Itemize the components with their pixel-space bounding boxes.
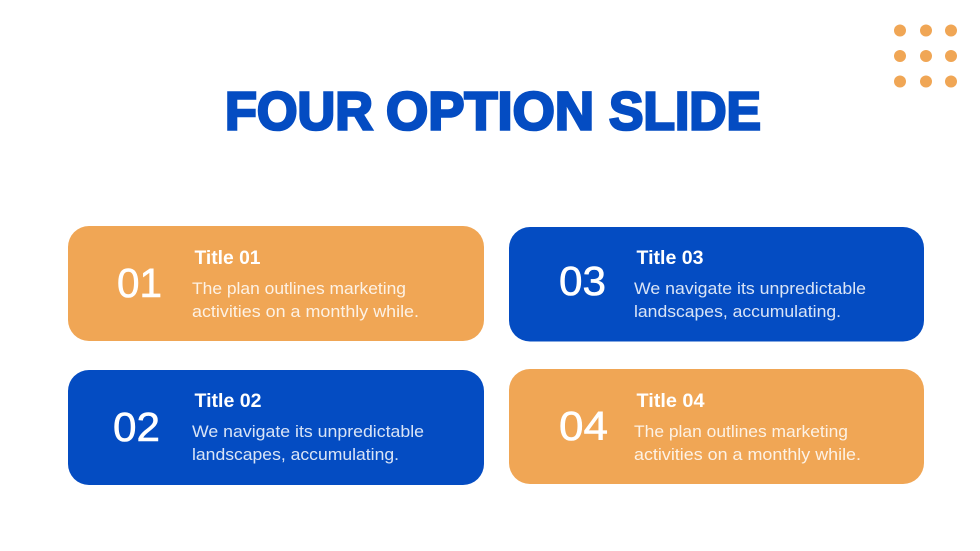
number 04: 04 [559,403,608,449]
number 01: 01 [117,260,162,306]
title: FOUR [225,82,373,142]
text block: option 04 description: activities on a monthly while. [634,445,861,464]
text block: option 01 description: activities on a monthly while. [192,302,419,321]
text block: option 02 description: landscapes, accumulating. [192,445,399,464]
heading: Title 03: Title 03 [636,248,704,269]
text block: option 01 description [192,279,419,321]
text block: option 03 description [634,279,866,321]
icon: dot grid [894,24,957,88]
text block: option 03 description: landscapes, accumulating. [634,302,841,321]
heading: Title 02: Title 02 [194,391,262,412]
text block: option 04 description [634,422,861,464]
number 03: 03 [559,258,606,304]
title [225,82,761,142]
panel: option 03 [509,227,924,342]
text block: option 04 description: The plan outlines marketing [634,422,848,441]
text block: option 02 description: We navigate its unpredictable [192,422,424,441]
panel: option 02 [68,370,484,485]
text block: option 01 description: The plan outlines marketing [192,279,406,298]
title: OPTION [386,82,594,142]
text block: option 02 description [192,422,424,464]
heading: Title 04: Title 04 [636,391,705,412]
title: SLIDE [609,82,761,142]
number 02: 02 [113,404,160,450]
panel: option 04 [509,369,924,484]
text block: option 03 description: We navigate its unpredictable [634,279,866,298]
panel: option 01 [68,226,484,341]
heading: Title 01: Title 01 [194,248,261,269]
